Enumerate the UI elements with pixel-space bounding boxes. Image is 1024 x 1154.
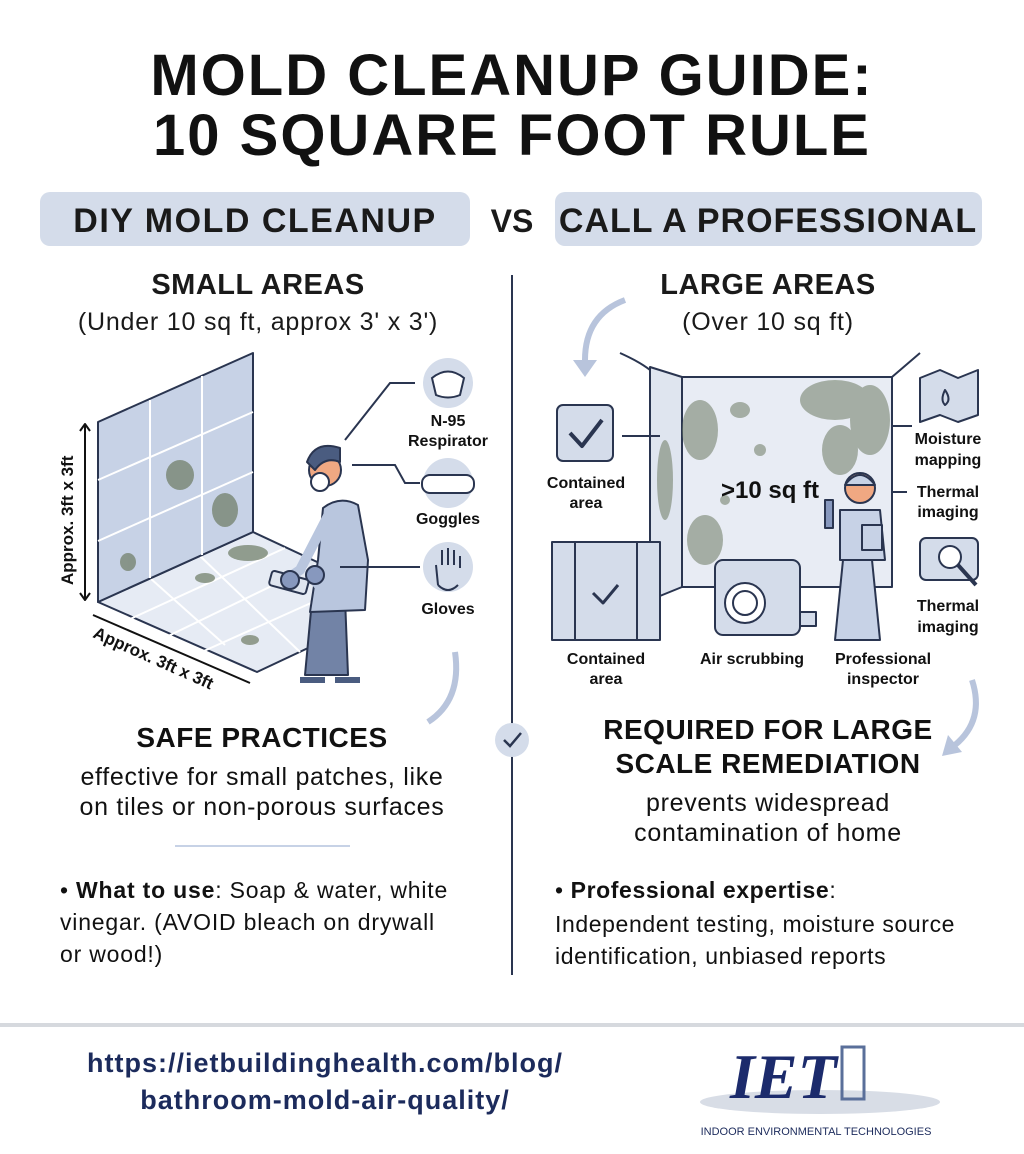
text: >10 sq ft xyxy=(721,477,819,504)
title: MOLD CLEANUP GUIDE: xyxy=(150,43,874,108)
VS label: VS xyxy=(491,203,533,239)
required text: contamination of home xyxy=(634,819,902,847)
PPE labels: Gloves xyxy=(421,601,475,618)
illustration: DIY tile corner with person xyxy=(80,353,368,683)
pro labels: Thermal xyxy=(917,484,979,501)
left heading: small areas: (Under 10 sq ft, approx 3' x 3') xyxy=(78,308,438,336)
footer URL xyxy=(87,1048,563,1115)
PPE labels xyxy=(408,413,488,618)
required text: prevents widespread xyxy=(646,789,890,817)
illustration: large room professional xyxy=(552,353,978,640)
pro labels: area xyxy=(570,495,603,512)
check circle xyxy=(495,723,529,757)
right heading: large areas xyxy=(660,269,876,336)
dimension labels xyxy=(58,455,217,693)
PPE icons xyxy=(340,358,474,592)
required text: REQUIRED FOR LARGE xyxy=(603,714,933,745)
IET logo: IET xyxy=(729,1041,840,1112)
title xyxy=(150,43,874,168)
bullet: what to use: • What to use: Soap & water, white xyxy=(60,877,448,903)
arrow: right bottom xyxy=(942,680,976,756)
header pill: professional: CALL A PROFESSIONAL xyxy=(559,202,977,240)
bullet: professional expertise: • Professional expertise: xyxy=(555,877,836,903)
header pill: DIY: DIY MOLD CLEANUP xyxy=(73,202,437,240)
pro labels: mapping xyxy=(915,452,981,469)
left heading: small areas: SMALL AREAS xyxy=(151,269,365,301)
arrow: right top xyxy=(573,300,625,377)
footer URL: https://ietbuildinghealth.com/blog/ xyxy=(87,1048,563,1078)
header pill: professional xyxy=(555,192,982,246)
pro labels: Professional xyxy=(835,651,931,668)
right heading: large areas: LARGE AREAS xyxy=(660,269,876,301)
safe practices text: effective for small patches, like xyxy=(80,763,444,791)
pro labels: Contained xyxy=(547,475,625,492)
PPE labels: Respirator xyxy=(408,433,488,450)
pro labels: inspector xyxy=(847,671,919,688)
pro labels: area xyxy=(590,671,623,688)
right heading: large areas: (Over 10 sq ft) xyxy=(682,308,854,336)
bullet: professional expertise xyxy=(555,877,955,969)
IET logo: INDOOR ENVIRONMENTAL TECHNOLOGIES xyxy=(701,1126,931,1138)
pro labels: Air scrubbing xyxy=(700,651,804,668)
pro labels: imaging xyxy=(917,619,979,636)
pro labels: Thermal xyxy=(917,598,979,615)
title: 10 SQUARE FOOT RULE xyxy=(153,103,871,168)
safe practices text xyxy=(80,722,444,821)
bullet: professional expertise: Independent testing, moisture source xyxy=(555,911,955,937)
dimension labels: Approx. 3ft x 3ft xyxy=(90,623,217,693)
safe practices text: on tiles or non-porous surfaces xyxy=(80,793,444,821)
PPE labels: Goggles xyxy=(416,511,480,528)
required text xyxy=(603,714,933,847)
IET logo xyxy=(700,1041,940,1138)
pro labels: Moisture xyxy=(915,431,981,448)
pro labels xyxy=(547,431,981,688)
pro labels: Contained xyxy=(567,651,645,668)
pro labels: imaging xyxy=(917,504,979,521)
PPE labels: N-95 xyxy=(431,413,465,430)
bullet: what to use: or wood!) xyxy=(60,941,163,967)
required text: SCALE REMEDIATION xyxy=(615,748,921,779)
bullet: what to use xyxy=(60,877,448,967)
header pill: DIY xyxy=(40,192,470,246)
safe practices text: SAFE PRACTICES xyxy=(136,722,388,753)
bullet: what to use: vinegar. (AVOID bleach on drywall xyxy=(60,909,435,935)
person xyxy=(305,598,348,675)
bullet: professional expertise: identification, unbiased reports xyxy=(555,943,886,969)
dimension labels: Approx. 3ft x 3ft xyxy=(58,455,77,585)
left heading: small areas xyxy=(78,269,438,336)
footer URL: bathroom-mold-air-quality/ xyxy=(140,1085,510,1115)
arrow: left down xyxy=(428,652,456,722)
